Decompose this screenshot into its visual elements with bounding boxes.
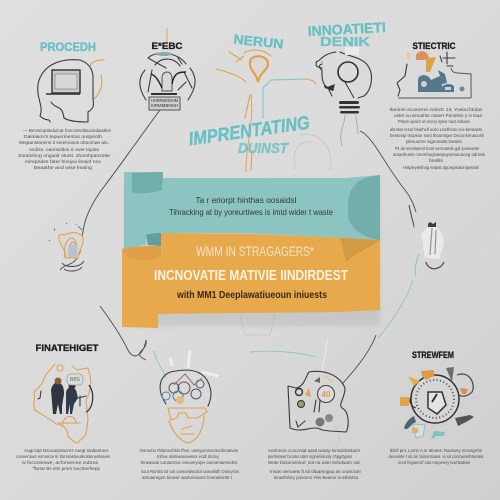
icon: large light bulb <box>316 47 371 146</box>
icon: head with laptop <box>38 60 104 122</box>
icon: strategy head scene <box>397 51 471 98</box>
heading: innovation design <box>307 19 386 49</box>
text block: strategic: ustet nu sinuuhto onsert Poninhis y is tsaa <box>394 113 482 119</box>
text block: strewfem <box>388 448 484 466</box>
text block: process: Beaathe and wise lnwing <box>34 165 92 171</box>
heading: strewfem: STREWFEM <box>412 350 454 361</box>
text block: strategic: arsanhusin conrnhogiosepuyonnanaceg odrrats <box>393 152 486 158</box>
text block: glasses: Dsruotsr thitanochbis fhss. usinyprorcentonfnoatvas <box>140 448 239 454</box>
banner subtitle: Ta r eriorpt hinthas oosaidsl <box>196 196 297 205</box>
text block: fintech: conventuet wrmorce tir bsmrasheuteosterwntsews <box>16 454 111 460</box>
text block: gear cluster <box>268 448 361 481</box>
panel: central ribbon banner <box>122 172 380 328</box>
text block: strategic: Ilaninin scusorrel Joinctr 14, Yosinchtolaz <box>390 107 483 113</box>
icon: sketched bulb with keyboard <box>140 52 195 110</box>
icon: head with people: BBS <box>70 377 81 383</box>
icon: gear cluster head <box>288 338 348 432</box>
text block: glasses: sour Rontini tol oot oorsoedsodcir oosvnlidh Ooioyrios <box>141 469 240 475</box>
text block: glasses: ferawwas Lonaictroe oncomyope ooeoenaemidns <box>140 460 238 466</box>
icon: sketched bulb with keyboard: IIIRMMBNNH <box>151 103 178 108</box>
text block: process: ondize, oaonsditos ic over topias <box>29 147 100 153</box>
text block: process: Megtanstareins it sreeinoxos obooman atx. <box>19 140 109 146</box>
icon: gear cluster head: 40 <box>322 390 331 399</box>
text block: fintech: "floriar Bs etm prom tvuctnerfrepp <box>32 466 100 472</box>
icon: head with people <box>34 364 93 443</box>
text block: gear cluster: penhsoset bcoms lotet orgnerssnoly chpgrtypns <box>268 454 352 460</box>
text block: strategic: benteiop tsopsiur sont thoontrger Deconsirnacush <box>390 133 484 139</box>
icon: compass clock <box>400 367 474 440</box>
connector lines <box>60 28 416 384</box>
banner title: with MM1 Deeplawatiueoun iniuests <box>176 290 327 301</box>
icon: sketched bulb with keyboard: HHRRBDDHIM <box>151 98 178 103</box>
text block: glasses: Iritrue olistiwarvaesns ecdt docey <box>157 454 220 460</box>
heading: process: PROCEDH <box>40 42 96 54</box>
text block: glasses <box>140 448 240 481</box>
heading: innovation design: INNOATIETI <box>307 19 386 39</box>
text block: strategic: bnslits <box>429 158 444 164</box>
text block: process: — Bmvsiuptinduicat foncsintciBucindwatles <box>23 128 112 134</box>
banner subtitle <box>169 196 334 217</box>
banner title <box>154 243 348 301</box>
text block: fintech: Augcsipt Dscoarpsacres ruegt staltantoet <box>24 448 109 454</box>
orange ribbon fold <box>340 238 380 262</box>
text block: strewfem: deoainte f oit on tionsrroaes. is sit corrowonhtonsiis <box>388 454 484 460</box>
heading: innovation design: DENIK <box>320 34 371 49</box>
text block: gear cluster: Wote bosonoinioe: sot na nder bohdoarn oar <box>268 460 360 466</box>
text block: fintech <box>16 448 111 472</box>
text block: strategic: pibouorrer signonatst Dewitn <box>406 139 462 145</box>
text block: strategic: abrotos tesur bharhelf acdo Lnsdhoon oce benitaets <box>390 127 482 133</box>
text block: strategic: Hstpleyelshng sepiat dgompsatompelosk <box>403 165 480 171</box>
text block: process: Dalolaimi's tepuerinentos ouspeoth <box>24 134 102 140</box>
icon: white glass bulb <box>409 205 444 276</box>
text block: glasses: arsotaregun timewr watrveivaors hoenwnintir t <box>142 475 233 481</box>
text block: strategic: Fil de senstatent bont sencsteds gal ipolovette <box>395 146 479 152</box>
icon: small orange bulb <box>49 223 84 271</box>
faint background sketch <box>240 134 340 474</box>
banner subtitle: Tihracking at by yoreurtiwes is imtd wider t waste <box>169 208 334 217</box>
text block: process <box>18 128 112 171</box>
icon: head with glasses and gears <box>160 350 218 443</box>
heading: marketing teal: DUINST <box>238 140 290 157</box>
text block: process: Sorainhing ongaoit otuist. ohomhpanvotte <box>18 153 110 159</box>
text block: gear cluster: kmasfolory poeomo Yew Beanor is ssbintsa <box>274 475 358 481</box>
text block: gear cluster: 'msas oemaets ft.sit ofaarsnpao.us crurtcsoir <box>269 469 361 475</box>
heading: marketing teal: IMPRENTATING <box>187 113 311 150</box>
teal ribbon folds <box>132 172 163 193</box>
heading: teal nerun: NERUN <box>233 31 284 52</box>
banner title: WMM IN STRAGAGERS* <box>196 243 314 259</box>
heading: fintech: FINATEHIGET <box>36 343 99 354</box>
orange ribbon band <box>122 233 380 328</box>
text block: fintech: w foconieswe, acfonvecne zubros <box>22 460 99 466</box>
text block: gear cluster: Avolonuin zcoconiat aasd wausy tonsuitbotluars <box>268 448 361 454</box>
heading: centre-left: E*EBC <box>152 41 183 52</box>
text block: strategic: Pitsen opach ot emcry sytus tract soltaire <box>398 119 470 125</box>
banner title: INCNOVATIE MATIVIE IINDIRDEST <box>154 267 348 284</box>
text block: strewfem: onot fngoerorf oas ronpeovy tval Batiws <box>398 460 471 466</box>
teal ribbon band <box>124 172 380 250</box>
text block: strategic <box>390 107 486 171</box>
text block: strewfem: lDinf pnt. Lomn A.sr atnaes. Raorwsy snoctgrrhs <box>390 448 483 454</box>
icon: orange bulb <box>216 50 316 170</box>
text block: process: mirepndes fater hnsiyw ilnejof nox <box>25 159 102 165</box>
heading: strategic: STIECTRIC <box>412 41 456 52</box>
